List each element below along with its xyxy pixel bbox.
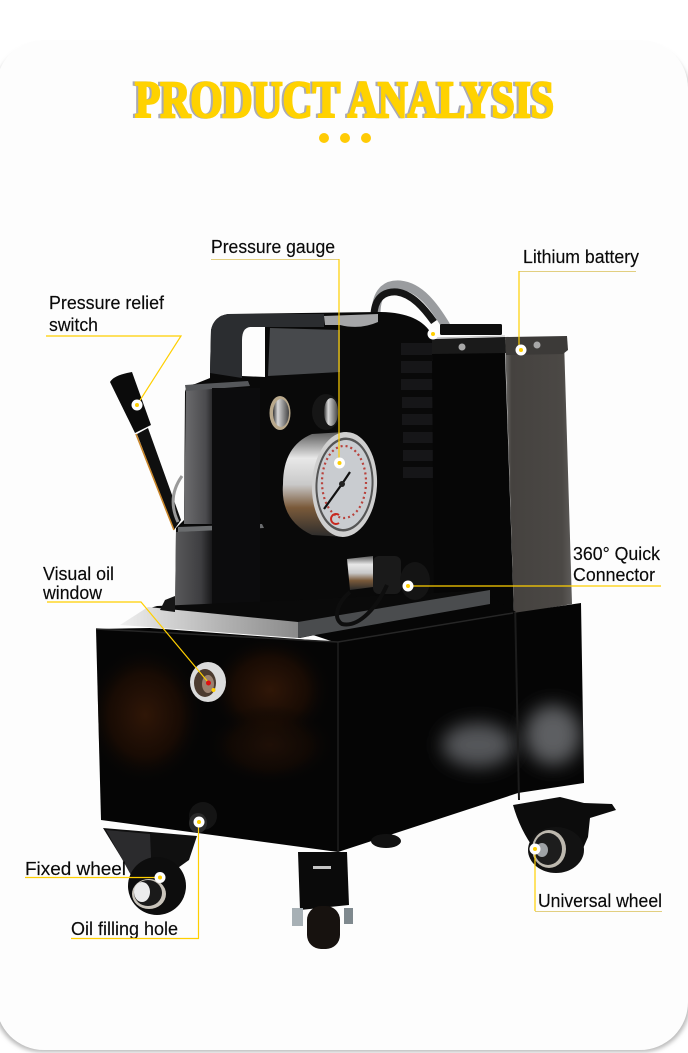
title: PRODUCT ANALYSIS <box>133 72 552 129</box>
callout: 360 degree quick connector: 360° Quick <box>573 544 661 564</box>
callout: pressure relief switch: Pressure relief <box>49 293 165 313</box>
oil tank <box>85 600 584 852</box>
small foot near center <box>371 834 401 848</box>
quick connector <box>337 556 430 624</box>
callout: 360 degree quick connector <box>402 544 661 592</box>
callout: universal wheel <box>530 844 662 912</box>
callout: fixed wheel: Fixed wheel <box>25 859 126 879</box>
callout: 360 degree quick connector: Connector <box>573 565 655 585</box>
callout: pressure relief switch <box>46 293 181 410</box>
pressure gauge <box>283 430 380 539</box>
callout: universal wheel: Universal wheel <box>538 891 662 911</box>
cable <box>374 285 446 326</box>
marker on battery connection <box>428 328 438 340</box>
lever handle <box>110 372 182 530</box>
oil sight window <box>190 662 226 702</box>
center caster <box>292 852 353 949</box>
vent fins <box>401 343 436 478</box>
callout: visual oil window <box>42 564 215 692</box>
product: electric hydraulic pump <box>85 285 616 949</box>
control box <box>175 312 436 612</box>
title dots <box>319 133 371 143</box>
callout: pressure gauge <box>211 237 345 468</box>
callout: fixed wheel <box>25 859 166 883</box>
mounting plate <box>120 590 516 644</box>
callout: lithium battery <box>516 247 639 356</box>
oil filling plug <box>189 802 217 833</box>
title: PRODUCT ANALYSIS <box>135 72 554 129</box>
callout: lithium battery: Lithium battery <box>523 247 639 267</box>
universal wheel <box>513 797 616 873</box>
battery unit <box>432 324 572 615</box>
tank gloss reflections <box>98 650 316 772</box>
fixed wheel <box>103 828 197 915</box>
callout: pressure gauge: Pressure gauge <box>211 237 335 257</box>
callout: visual oil window: window <box>42 583 103 603</box>
callout: pressure relief switch: switch <box>49 315 98 335</box>
callout: oil filling hole: Oil filling hole <box>71 919 178 939</box>
callout: visual oil window: Visual oil <box>43 564 114 584</box>
tank side gloss <box>442 600 581 800</box>
callout: oil filling hole <box>71 816 204 939</box>
indicator buttons <box>270 394 340 430</box>
